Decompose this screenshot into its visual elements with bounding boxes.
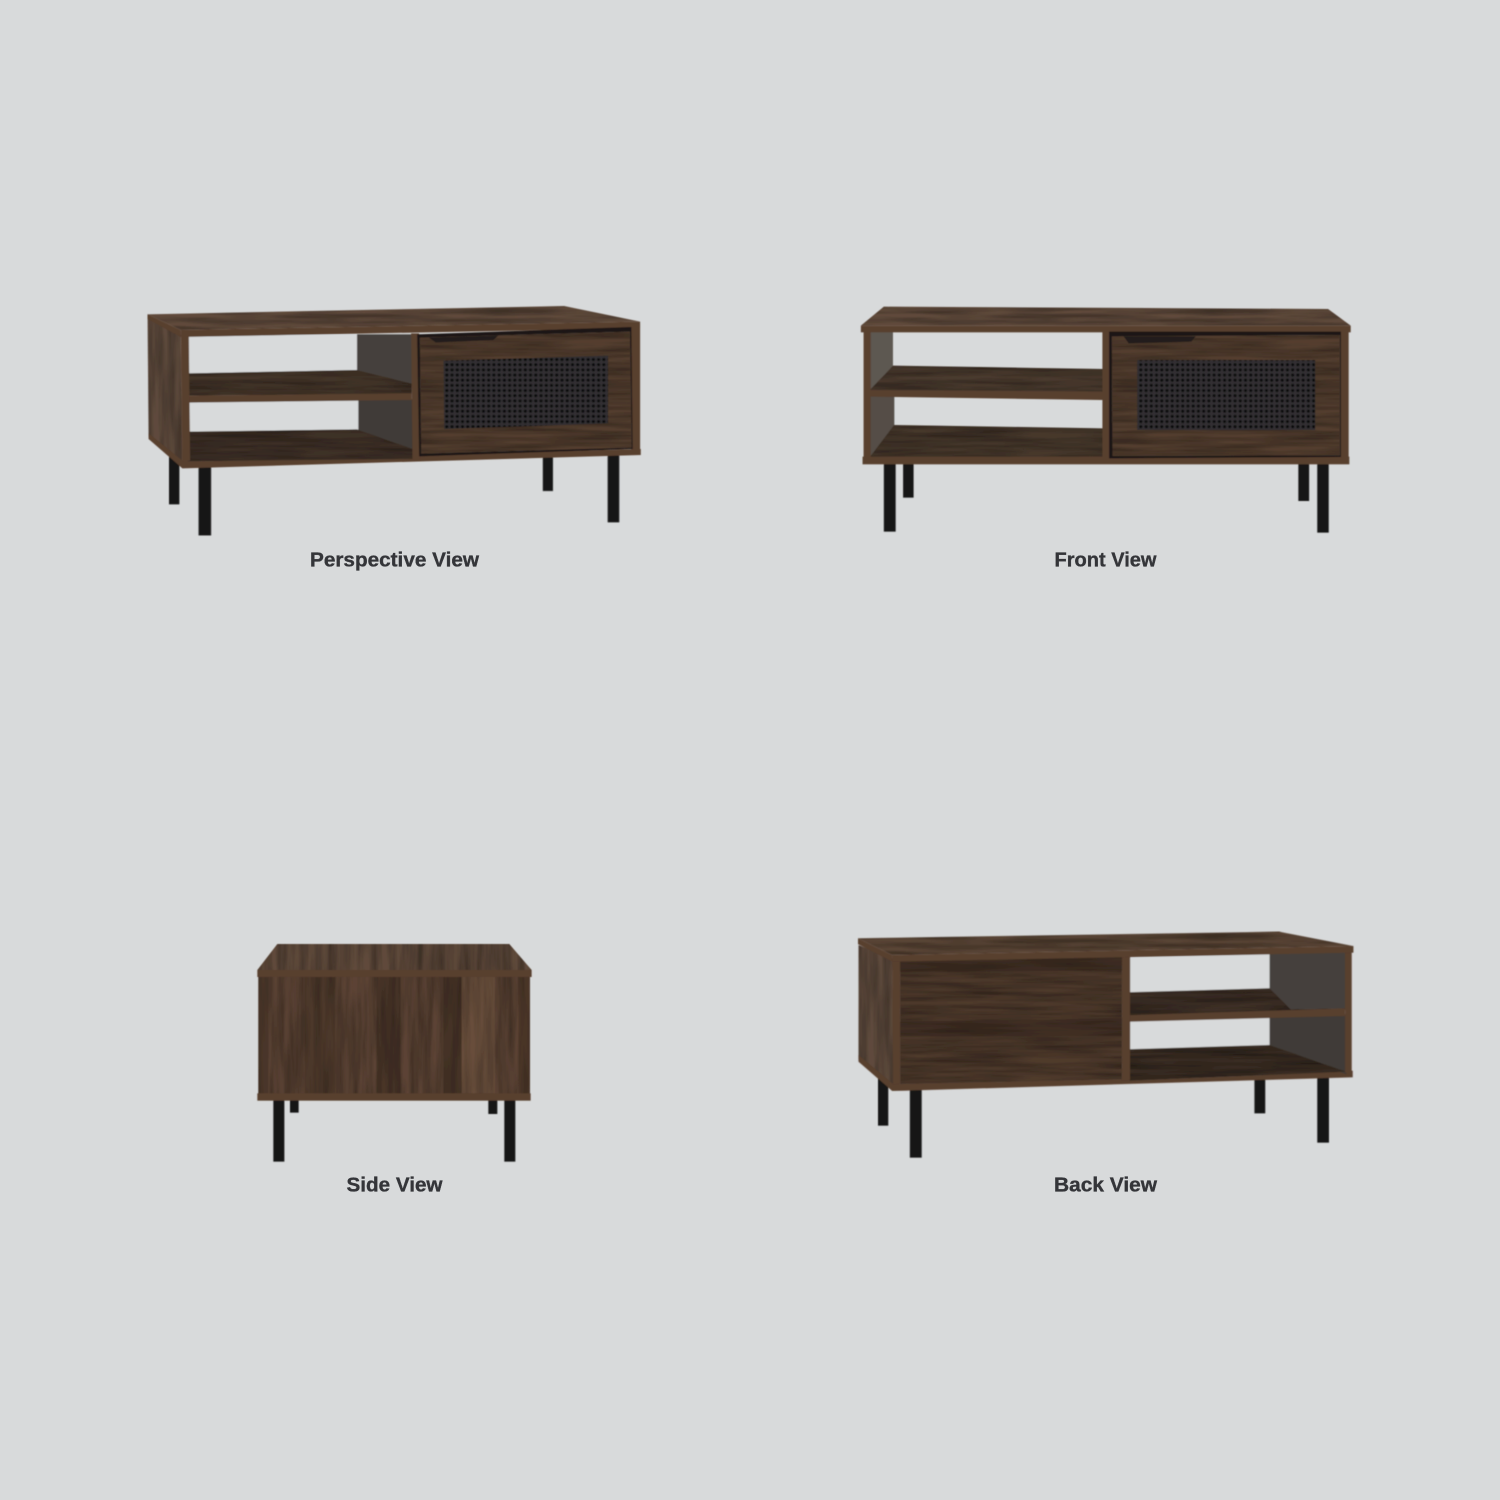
drawer handle xyxy=(1124,336,1196,343)
top board xyxy=(148,306,640,330)
top board xyxy=(861,307,1351,326)
drawer front xyxy=(417,327,633,456)
front posts and divider xyxy=(181,334,190,462)
table: perspective view xyxy=(148,306,641,536)
panel: back view xyxy=(858,932,1353,1196)
drawer mesh panel xyxy=(1137,360,1315,430)
posts and divider xyxy=(892,958,901,1085)
middle shelf xyxy=(188,370,412,396)
left side panel xyxy=(148,314,182,463)
panel: side view xyxy=(257,944,532,1196)
bottom shelf xyxy=(869,425,1104,458)
top board xyxy=(257,944,532,970)
upper and lower openings xyxy=(188,335,358,374)
bottom shelf xyxy=(1129,1045,1346,1081)
middle shelf xyxy=(869,366,1104,392)
side panel xyxy=(258,976,530,1094)
drawer front xyxy=(1109,332,1341,458)
openings xyxy=(1129,954,1271,993)
left side panel xyxy=(859,945,894,1087)
back wall xyxy=(1270,951,1346,1012)
wooden back panel xyxy=(900,956,1122,1084)
posts and divider xyxy=(864,330,871,458)
panel: perspective view xyxy=(148,306,641,572)
table: side view xyxy=(257,944,532,1162)
drawer handle xyxy=(429,336,498,342)
bottom board xyxy=(149,433,641,468)
legs xyxy=(878,1076,1329,1158)
top board xyxy=(858,932,1353,955)
dark plank bands xyxy=(900,956,1122,1037)
panel: front view xyxy=(861,307,1351,572)
bottom board xyxy=(863,457,1349,464)
drawer mesh panel xyxy=(443,356,608,429)
back wall xyxy=(357,334,412,385)
side walls xyxy=(869,331,893,394)
middle shelf xyxy=(1129,988,1345,1016)
legs xyxy=(273,1098,515,1162)
legs xyxy=(169,453,619,536)
label: back view: Back View xyxy=(1054,1174,1157,1196)
label: front view: Front View xyxy=(1054,550,1157,572)
label: perspective view: Perspective View xyxy=(310,550,479,572)
label: side view: Side View xyxy=(346,1174,443,1196)
vertical plank tones xyxy=(258,977,530,1093)
bottom board xyxy=(859,1055,1353,1091)
bottom board xyxy=(257,1093,531,1101)
table: front view xyxy=(861,307,1351,533)
legs xyxy=(884,460,1329,533)
table: back view xyxy=(858,932,1353,1158)
bottom shelf xyxy=(188,429,413,461)
